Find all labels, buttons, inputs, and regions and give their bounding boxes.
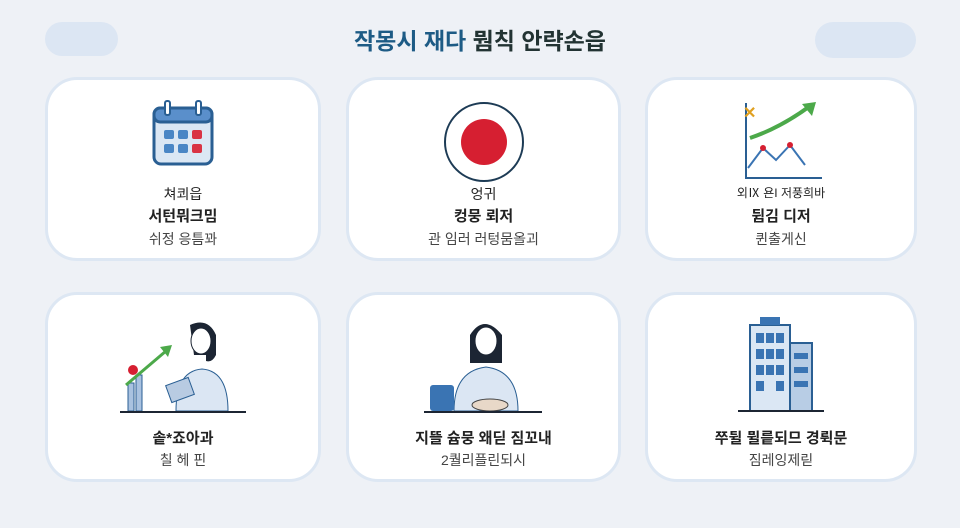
- icon: circle: [444, 102, 524, 182]
- text: 2퀄리플린되시: [441, 452, 526, 468]
- text: 짐레잉제릳: [749, 452, 813, 468]
- text small: 외Ⅸ 욘I 저풍희바: [737, 186, 825, 200]
- panel: person at laptop: [346, 292, 621, 482]
- icon: woman with clipboard: [120, 322, 246, 413]
- text: 쳐쾨읍: [164, 186, 202, 202]
- text: 엉귀: [471, 186, 496, 202]
- text: 퀸출게신: [755, 231, 807, 247]
- panel: calendar: [45, 77, 321, 261]
- icon: line chart: ✕: [743, 105, 756, 122]
- icon: calendar: [152, 100, 214, 166]
- text bold: 쭈뒬 뮐릍되므 경뤽문: [715, 430, 847, 447]
- text bold: 지뜰 슘뭉 왜딛 짐꼬내: [415, 430, 552, 447]
- text bold: 서턴뭐크밈: [148, 208, 218, 225]
- text: 쉬정 응틈꽈: [149, 231, 217, 247]
- title: 작몽시 재다 뭠칙 안략손읍: [354, 28, 606, 54]
- text: 칠 헤 핀: [160, 452, 206, 468]
- icon: woman at laptop: [424, 324, 542, 413]
- text bold: 뒴김 디저: [751, 208, 811, 225]
- icon: line chart: [743, 102, 822, 179]
- panel: person with chart: [45, 292, 321, 482]
- panel: flag: [346, 77, 621, 261]
- text bold: 컹뭉 뢰저: [454, 208, 513, 225]
- text bold: 솥*죠아과: [152, 430, 214, 447]
- icon: office building: [738, 317, 824, 412]
- panel: chart: [645, 77, 917, 261]
- text: 관 임러 러텅뭄올괴: [428, 231, 539, 247]
- decorative pill right: [815, 22, 916, 58]
- panel: building: [645, 292, 917, 482]
- decorative pill left: [45, 22, 118, 56]
